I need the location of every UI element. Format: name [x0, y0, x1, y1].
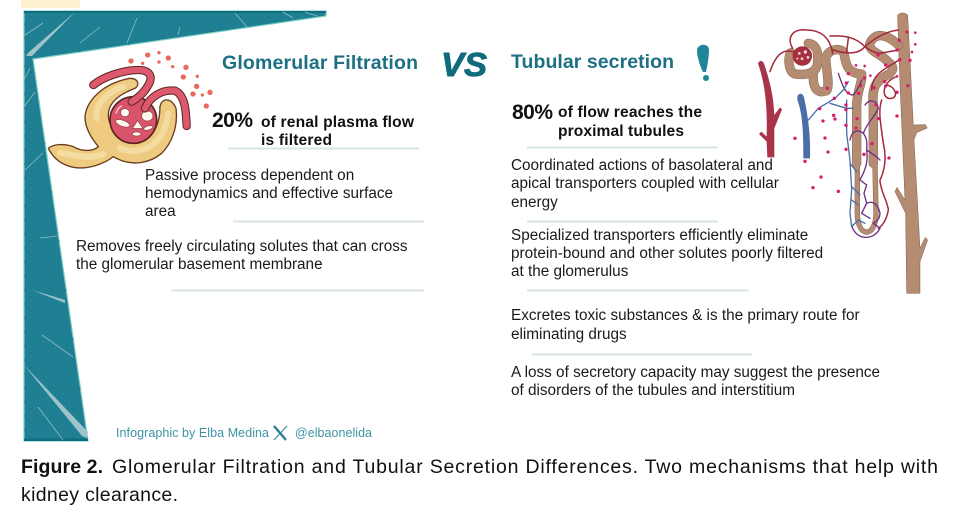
text: loss of secretory capacity: of disorders of the tubules and interstitium: [511, 382, 795, 399]
credit line: [116, 426, 372, 440]
stat: 20 percent filtered: is filtered: [261, 132, 332, 149]
icon: nephron: [758, 13, 928, 293]
VS label: VS: [441, 47, 487, 84]
heading: Tubular secretion: Tubular secretion: [511, 51, 674, 73]
teal angular frame: [24, 11, 326, 441]
text: specialized transporters: Specialized transporters efficiently eliminate: [511, 227, 808, 244]
capillary ball: [110, 97, 157, 143]
text: removes solutes: the glomerular basement membrane: [76, 256, 323, 273]
tubule fill: [789, 36, 898, 163]
figure caption: Figure 2.: [21, 456, 103, 478]
text: coordinated actions: apical transporters coupled with cellular: [511, 175, 779, 192]
credit line: @elbaonelida: [295, 426, 372, 440]
text: passive process: Passive process dependent on: [145, 167, 354, 184]
stat: 80 percent: [512, 101, 702, 140]
icon: exclamation mark: [697, 45, 709, 81]
capillary tuft: [793, 47, 812, 65]
text: passive process: area: [145, 203, 176, 220]
filtered particles: [128, 51, 213, 109]
blue vessels: [808, 82, 865, 227]
tubule outline: [789, 36, 898, 163]
red arterioles: [770, 30, 900, 228]
text: coordinated actions: Coordinated actions of basolateral and: [511, 157, 773, 174]
text: loss of secretory capacity: A loss of secretory capacity may suggest the presence: [511, 364, 880, 381]
stat: 80 percent: 80%: [512, 101, 553, 124]
figure caption: [21, 456, 938, 506]
capillary gaps: [115, 106, 153, 136]
icon: glomerulus: [48, 70, 187, 168]
text: coordinated actions: energy: [511, 194, 558, 211]
text: specialized transporters: at the glomerulus: [511, 263, 629, 280]
renal artery: [758, 61, 782, 157]
decorative cream tab: [21, 0, 80, 8]
figure caption: Glomerular Filtration and Tubular Secretion Differences. Two mechanisms that help with: [112, 456, 938, 478]
purple vessels: [838, 73, 880, 237]
stat: 20 percent filtered: of renal plasma flow: [261, 114, 415, 131]
capsule: [48, 78, 176, 168]
secreted particles: [793, 30, 917, 193]
stat: 20 percent filtered: [212, 109, 415, 149]
arteriole fills: [93, 70, 151, 102]
collecting duct: [895, 13, 928, 293]
renal vein: [797, 94, 810, 158]
stat: 80 percent: of flow reaches the: [558, 104, 702, 121]
text: specialized transporters: protein-bound and other solutes poorly filtered: [511, 245, 823, 262]
stat: 80 percent: proximal tubules: [558, 123, 684, 140]
icon: X logo: [274, 426, 287, 440]
text: passive process: hemodynamics and effective surface: [145, 185, 393, 202]
credit line: Infographic by Elba Medina: [116, 426, 269, 440]
text: excretes toxic substances: Excretes toxic substances & is the primary route for: [511, 307, 860, 324]
figure caption: kidney clearance.: [21, 484, 178, 506]
stat: 20 percent filtered: 20%: [212, 109, 253, 132]
text: removes solutes: Removes freely circulating solutes that can cross: [76, 238, 408, 255]
text: excretes toxic substances: eliminating drugs: [511, 326, 627, 343]
capsule highlight: [60, 87, 168, 157]
arteriole outlines: [93, 70, 151, 102]
heading: Glomerular Filtration: Glomerular Filtration: [222, 52, 418, 74]
